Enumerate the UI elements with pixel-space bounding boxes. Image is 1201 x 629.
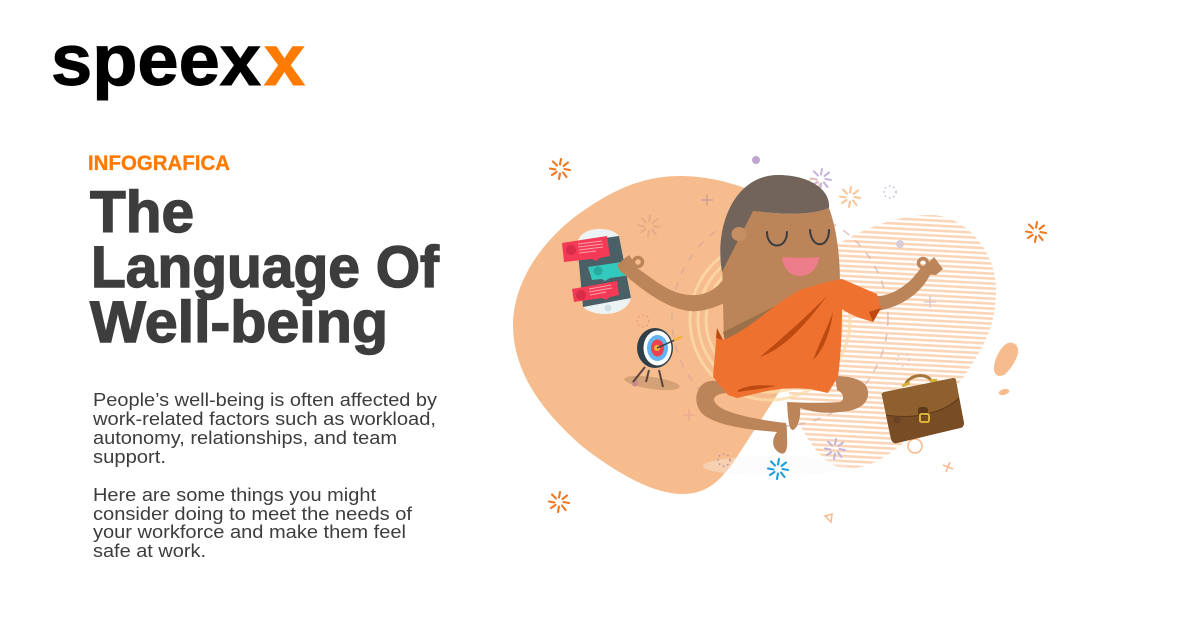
hair <box>720 175 829 272</box>
text block: second paragraph: your workforce and make them feel <box>93 521 406 542</box>
character: monk <box>617 175 943 454</box>
ground shadow <box>703 456 847 476</box>
neck shadow <box>723 279 842 342</box>
left leg <box>696 381 787 454</box>
text block: intro paragraph: support. <box>93 446 166 467</box>
text block: second paragraph: consider doing to meet the needs of <box>93 503 413 524</box>
robe folds <box>716 296 881 392</box>
text block: intro paragraph: work-related factors such as workload, <box>92 408 436 429</box>
text block: second paragraph: Here are some things you might <box>93 484 377 505</box>
right arm <box>871 267 930 313</box>
dashed orbit <box>672 210 888 426</box>
text block: intro paragraph: People’s well-being is often affected by <box>93 389 438 410</box>
title: Language Of <box>91 235 440 300</box>
left arm <box>626 266 724 311</box>
robe <box>713 279 881 398</box>
title: The <box>90 180 194 245</box>
background blob: striped <box>780 215 996 469</box>
icon: briefcase <box>882 376 964 443</box>
title: Well-being <box>90 290 388 355</box>
concentric rings <box>690 240 850 400</box>
ear <box>732 227 746 241</box>
logo: speexx: x <box>264 21 305 101</box>
title <box>90 180 440 355</box>
icon: phone with chat bubbles <box>562 229 635 314</box>
left hand <box>617 255 642 277</box>
text block: second paragraph <box>93 484 413 561</box>
eyes <box>767 230 829 246</box>
text block: intro paragraph: autonomy, relationships, and team <box>93 427 397 448</box>
illustration: meditating monk scene <box>513 156 1046 522</box>
text block: intro paragraph <box>92 389 438 467</box>
eyebrow: INFOGRAFICA: INFOGRAFICA <box>88 152 230 175</box>
icon: target with arrow <box>623 328 682 393</box>
decorative marks <box>549 156 1046 522</box>
logo: speexx: speex <box>51 21 261 101</box>
right hand <box>918 257 943 275</box>
text block: second paragraph: safe at work. <box>93 540 206 561</box>
torso and head skin <box>722 208 840 346</box>
mouth <box>782 257 819 276</box>
background blob: peach <box>513 176 800 494</box>
right leg <box>787 376 868 430</box>
